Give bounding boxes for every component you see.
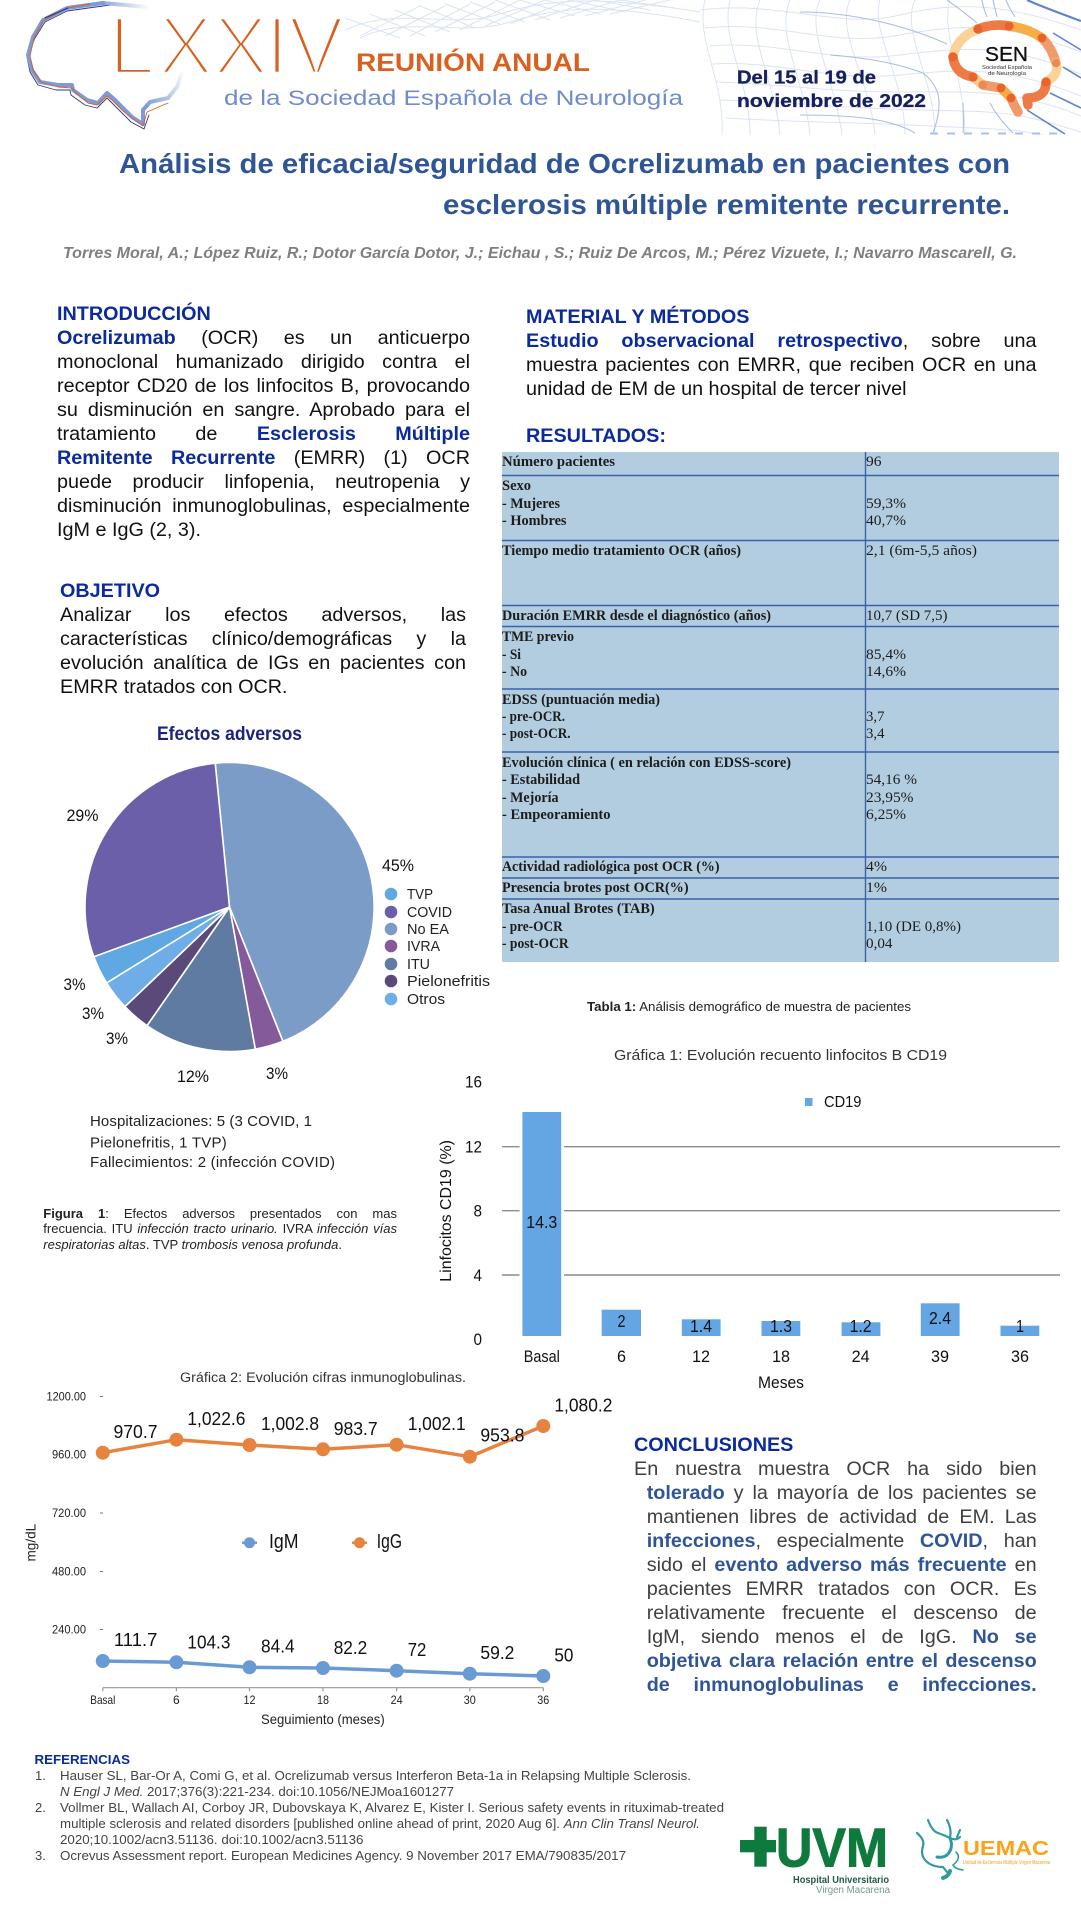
- text block: introducción: tratamiento de Esclerosis Múltiple: [57, 423, 470, 445]
- table: demographics: 85,4%: [866, 647, 906, 663]
- table: demographics: - No: [502, 664, 527, 680]
- table: demographics: - pre-OCR: [502, 919, 563, 935]
- text block: introducción: monoclonal humanizado dirigido contra el: [57, 351, 470, 373]
- bar chart categories: 36: [1011, 1347, 1029, 1366]
- line chart y axis: 720.00: [52, 1506, 86, 1520]
- figure caption: respiratorias altas. TVP trombosis venosa profunda.: [43, 1237, 342, 1252]
- text block: conclusiones: infecciones, especialmente COVID, han: [647, 1530, 1037, 1552]
- text block: objetivo: [60, 580, 466, 698]
- line chart y axis: 240.00: [52, 1622, 86, 1636]
- event dates: noviembre de 2022: [737, 91, 926, 111]
- references: 1.: [35, 1768, 46, 1783]
- line chart: immunoglobulins: [23, 1390, 612, 1727]
- pie percent labels: 3%: [64, 976, 86, 994]
- figure caption: Figura 1: Efectos adversos presentados con mas: [43, 1206, 397, 1221]
- line chart x labels: 30: [464, 1693, 476, 1707]
- pie percent labels: [64, 807, 414, 1086]
- text block: material y métodos: Estudio observacional retrospectivo, sobre una: [526, 330, 1036, 352]
- bar chart categories: 24: [852, 1347, 870, 1366]
- text block: introducción: IgM e IgG (2, 3).: [57, 519, 201, 541]
- table: demographics: 23,95%: [866, 790, 914, 806]
- bar value labels: [526, 1212, 1024, 1336]
- series: IgG: 1,080.2: [554, 1396, 612, 1416]
- pie percent labels: 3%: [266, 1065, 288, 1083]
- line chart x labels: 36: [537, 1693, 550, 1707]
- bar chart categories: 39: [931, 1347, 949, 1366]
- table: demographics: 40,7%: [866, 513, 906, 529]
- series: IgG: [96, 1396, 612, 1464]
- header wave background: [345, 0, 1081, 140]
- bar chart categories: Basal: [524, 1347, 560, 1366]
- table: demographics: 4%: [866, 859, 887, 875]
- hospitalizations note: Pielonefritis, 1 TVP): [90, 1134, 227, 1152]
- table: demographics: EDSS (puntuación media): [502, 692, 660, 708]
- text block: material y métodos: [526, 306, 1036, 400]
- hospitalizations note: Hospitalizaciones: 5 (3 COVID, 1: [90, 1113, 312, 1130]
- series: IgG: 953.8: [480, 1426, 524, 1446]
- bar chart y axis: 0: [474, 1330, 482, 1349]
- table: demographics: Presencia brotes post OCR(%): [502, 880, 689, 896]
- text block: conclusiones: tolerado y la mayoría de los pacientes se: [647, 1482, 1037, 1504]
- bar value labels: 14.3: [526, 1212, 557, 1232]
- line chart x labels: 6: [173, 1693, 180, 1707]
- series: IgM: 72: [408, 1640, 426, 1660]
- series: IgM: 50: [554, 1646, 573, 1666]
- line chart y axis: 1200.00: [46, 1390, 86, 1404]
- table: demographics: TME previo: [502, 629, 574, 645]
- authors: Torres Moral, A.; López Ruiz, R.; Dotor García Dotor, J.; Eichau , S.; Ruiz De Arcos, M.; Pérez Vizuete, I.; Navarro Mascarell, G.: [63, 245, 1017, 262]
- table: demographics: 59,3%: [866, 496, 906, 512]
- series: IgG: 1,022.6: [187, 1409, 245, 1429]
- pie legend: TVP: [407, 886, 433, 903]
- table: demographics: Duración EMRR desde el diagnóstico (años): [502, 608, 771, 624]
- text block: introducción: disminución inmunoglobulinas, especialmente: [57, 495, 470, 517]
- references: Hauser SL, Bar-Or A, Comi G, et al. Ocrelizumab versus Interferon Beta-1a in Relapsing Multiple Sclerosis.: [60, 1768, 691, 1783]
- header banner: [27, 0, 1081, 140]
- references: Vollmer BL, Wallach AI, Corboy JR, Dubovskaya K, Alvarez E, Kister I. Serious safety events in rituximab-treated: [60, 1800, 724, 1815]
- pie percent labels: 12%: [177, 1068, 209, 1086]
- table: demographics: 54,16 %: [866, 772, 917, 788]
- references: Ocrevus Assessment report. European Medicines Agency. 9 November 2017 EMA/790835/2017: [60, 1848, 626, 1863]
- chart title: grafica 1: Gráfica 1: Evolución recuento linfocitos B CD19: [614, 1048, 947, 1064]
- pie percent labels: 3%: [106, 1030, 128, 1048]
- SEN logo: [949, 22, 1060, 112]
- bar chart y axis: 8: [474, 1202, 482, 1220]
- line chart legend: IgM: [269, 1531, 298, 1553]
- line chart x labels: 18: [317, 1693, 329, 1707]
- table: demographics: 14,6%: [866, 664, 906, 680]
- bar chart legend: CD19: [824, 1094, 861, 1111]
- line chart y title: mg/dL: [23, 1524, 39, 1562]
- table: demographics: - Mejoría: [502, 790, 559, 806]
- pie title: Efectos adversos: [157, 724, 302, 745]
- references: 2020;10.1002/acn3.51136. doi:10.1002/acn3.51136: [60, 1832, 363, 1847]
- bar chart y title: Linfocitos CD19 (%): [438, 1140, 455, 1282]
- table: demographics: Evolución clínica ( en relación con EDSS-score): [502, 755, 791, 771]
- text block: conclusiones: sido el evento adverso más frecuente en: [647, 1554, 1037, 1576]
- bar chart y axis: [465, 1072, 482, 1349]
- table: demographics: - Empeoramiento: [502, 807, 610, 823]
- text block: introducción: [57, 302, 470, 541]
- text block: objetivo: OBJETIVO: [60, 580, 160, 602]
- pie legend: Otros: [407, 991, 445, 1008]
- SEN logo: SEN: [985, 44, 1028, 66]
- table: demographics: 3,4: [866, 726, 885, 742]
- text block: material y métodos: muestra pacientes con EMRR, que reciben OCR en una: [526, 354, 1036, 376]
- text block: objetivo: Analizar los efectos adversos, las: [60, 604, 466, 626]
- line chart x labels: 24: [391, 1693, 403, 1707]
- series: IgM: [96, 1630, 573, 1683]
- pie slices: [85, 762, 374, 1052]
- text block: conclusiones: mantienen libres de actividad de EM. Las: [647, 1506, 1037, 1528]
- table: demographics: [502, 452, 1059, 962]
- icon: brain outline: [27, 3, 183, 129]
- text block: conclusiones: IgM, siendo menos el de IgG. No se: [647, 1626, 1037, 1648]
- title: [119, 148, 1010, 220]
- line chart y axis: [46, 1390, 103, 1636]
- table: demographics: - post-OCR: [502, 936, 569, 952]
- references: 2.: [35, 1800, 46, 1815]
- bar chart: CD19: [438, 1072, 1060, 1392]
- text block: conclusiones: objetiva clara relación entre el descenso: [647, 1650, 1037, 1672]
- logo: Hospital Universitario Virgen Macarena: Virgen Macarena: [816, 1885, 890, 1896]
- bar chart x title: Meses: [758, 1373, 804, 1392]
- logo: Hospital Universitario Virgen Macarena: UVM: [776, 1817, 888, 1879]
- bar value labels: 2: [618, 1311, 626, 1331]
- text block: conclusiones: de inmunoglobulinas e infecciones.: [647, 1674, 1037, 1696]
- table: demographics: Sexo: [502, 478, 531, 494]
- chart title: grafica 2: Gráfica 2: Evolución cifras inmunoglobulinas.: [180, 1370, 466, 1385]
- title: Análisis de eficacia/seguridad de Ocrelizumab en pacientes con: [119, 148, 1010, 179]
- logo: Hospital Universitario Virgen Macarena: Hospital Universitario: [793, 1874, 889, 1886]
- text block: introducción: su disminución en sangre. Aprobado para el: [57, 399, 470, 421]
- line chart x title: Seguimiento (meses): [261, 1711, 385, 1727]
- series: IgM: 104.3: [187, 1632, 230, 1652]
- table: demographics: - Si: [502, 647, 521, 663]
- bar value labels: 1.4: [690, 1316, 712, 1336]
- text block: material y métodos: MATERIAL Y MÉTODOS: [526, 306, 749, 328]
- logo: Hospital Universitario Virgen Macarena: [740, 1817, 890, 1896]
- series: IgG: 1,002.1: [408, 1414, 466, 1434]
- series: IgM: 111.7: [114, 1630, 157, 1650]
- bar chart gridlines: [502, 1147, 1060, 1275]
- references: REFERENCIAS: [34, 1752, 130, 1767]
- text block: introducción: INTRODUCCIÓN: [57, 303, 211, 325]
- references: 3.: [35, 1848, 46, 1863]
- line chart x labels: Basal: [90, 1693, 115, 1707]
- heading: reunión anual: REUNIÓN ANUAL: [356, 47, 590, 77]
- line chart y axis: 480.00: [52, 1564, 86, 1578]
- figure caption: [43, 1206, 397, 1252]
- references: multiple sclerosis and related disorders [published online ahead of print, 2020 Aug 6]. Ann Clin Transl Neurol.: [60, 1816, 700, 1831]
- text block: conclusiones: relativamente frecuente el descenso de: [647, 1602, 1037, 1624]
- subheading: sociedad: de la Sociedad Española de Neurología: [224, 87, 683, 110]
- SEN logo: de Neurología: [988, 71, 1027, 77]
- table: demographics: - Mujeres: [502, 496, 560, 512]
- bar chart categories: 6: [617, 1347, 626, 1366]
- line chart x axis: [103, 1688, 543, 1691]
- series: IgM: 59.2: [480, 1643, 514, 1663]
- table caption: Tabla 1: Análisis demográfico de muestra de pacientes: [587, 999, 911, 1014]
- text block: conclusiones: pacientes EMRR tratados con OCR. Es: [647, 1578, 1037, 1600]
- text block: objetivo: características clínico/demográficas y la: [60, 628, 466, 650]
- logo: UEMAC: [917, 1820, 1050, 1878]
- pie percent labels: 29%: [66, 807, 99, 825]
- table: demographics: 10,7 (SD 7,5): [866, 608, 948, 624]
- hospitalizations note: Fallecimientos: 2 (infección COVID): [90, 1154, 335, 1171]
- text block: objetivo: evolución analítica de IGs en pacientes con: [60, 652, 466, 674]
- line chart x labels: 12: [244, 1693, 256, 1707]
- text block: material y métodos: unidad de EM de un hospital de tercer nivel: [526, 378, 906, 400]
- figure caption: frecuencia. ITU infección tracto urinario. IVRA infección vías: [43, 1221, 397, 1236]
- series: IgG: 1,002.8: [261, 1414, 319, 1434]
- pie legend: No EA: [407, 921, 449, 938]
- text block: introducción: receptor CD20 de los linfocitos B, provocando: [57, 375, 470, 397]
- text block: conclusiones: [634, 1434, 1037, 1696]
- bars: [522, 1112, 1039, 1336]
- event dates: Del 15 al 19 de: [737, 68, 876, 88]
- text block: introducción: puede producir linfopenia, neutropenia y: [57, 471, 470, 493]
- pie percent labels: 3%: [82, 1005, 104, 1023]
- bar chart categories: [524, 1347, 1029, 1366]
- series: IgM: 82.2: [334, 1638, 367, 1658]
- pie legend: [385, 886, 490, 1008]
- pie percent labels: 45%: [382, 857, 414, 875]
- pie chart: efectos adversos: [64, 724, 490, 1086]
- bar chart y axis: 12: [465, 1138, 482, 1156]
- text block: conclusiones: CONCLUSIONES: [634, 1434, 793, 1456]
- SEN logo: Sociedad Española: [982, 65, 1033, 71]
- text block: objetivo: EMRR tratados con OCR.: [60, 676, 288, 698]
- table: demographics: 3,7: [866, 709, 885, 725]
- text block: introducción: Ocrelizumab (OCR) es un anticuerpo: [57, 327, 470, 349]
- table: demographics: - Estabilidad: [502, 772, 581, 788]
- title: esclerosis múltiple remitente recurrente.: [443, 189, 1010, 220]
- references: N Engl J Med. 2017;376(3):221-234. doi:10.1056/NEJMoa1601277: [60, 1784, 454, 1799]
- bar chart legend: [805, 1094, 861, 1111]
- pie legend: IVRA: [407, 938, 440, 955]
- logo: UEMAC: UEMAC: [963, 1837, 1049, 1860]
- table: demographics: 6,25%: [866, 807, 906, 823]
- bar value labels: 1.2: [850, 1316, 872, 1336]
- bar chart categories: 12: [692, 1347, 710, 1366]
- table: demographics: Número pacientes: [502, 454, 615, 470]
- event dates: [737, 68, 926, 111]
- table: demographics: - post-OCR.: [502, 726, 571, 742]
- table: demographics: 96: [866, 454, 882, 470]
- bar chart y axis: 4: [474, 1266, 482, 1285]
- table: demographics: - Hombres: [502, 513, 567, 529]
- bar value labels: 2.4: [929, 1308, 951, 1328]
- line chart y axis: 960.00: [52, 1448, 86, 1462]
- pie legend: COVID: [407, 904, 452, 921]
- text block: introducción: Remitente Recurrente (EMRR) (1) OCR: [57, 447, 470, 469]
- line chart legend: IgG: [377, 1531, 402, 1553]
- table: demographics: - pre-OCR.: [502, 709, 565, 725]
- hospitalizations note: [90, 1113, 335, 1171]
- series: IgG: 983.7: [334, 1419, 378, 1439]
- line chart legend: [242, 1531, 402, 1553]
- series: IgM: 84.4: [261, 1637, 295, 1657]
- table: demographics: Actividad radiológica post OCR (%): [502, 859, 720, 875]
- pie legend: Pielonefritis: [407, 973, 490, 990]
- LXXIV numeral: LXXIV: [109, 0, 344, 92]
- table: demographics: 0,04: [866, 936, 893, 952]
- table: demographics: 2,1 (6m-5,5 años): [866, 543, 977, 559]
- bar value labels: 1: [1016, 1316, 1024, 1336]
- text block: conclusiones: En nuestra muestra OCR ha sido bien: [634, 1458, 1037, 1480]
- bar chart categories: 18: [772, 1347, 790, 1366]
- bar value labels: 1.3: [770, 1316, 792, 1336]
- references: [34, 1752, 724, 1863]
- table: demographics: Tiempo medio tratamiento OCR (años): [502, 543, 741, 559]
- heading: resultados: RESULTADOS:: [526, 425, 666, 447]
- table: demographics: 1,10 (DE 0,8%): [866, 919, 961, 935]
- line chart x labels: [90, 1693, 550, 1707]
- logo: UEMAC: Unidad de Esclerosis Múltiple Virgen Macarena: [963, 1860, 1050, 1866]
- pie legend: ITU: [407, 956, 430, 973]
- series: IgG: 970.7: [114, 1422, 158, 1442]
- table: demographics: Tasa Anual Brotes (TAB): [502, 901, 655, 917]
- table: demographics: 1%: [866, 880, 887, 896]
- bar chart y axis: 16: [465, 1072, 482, 1092]
